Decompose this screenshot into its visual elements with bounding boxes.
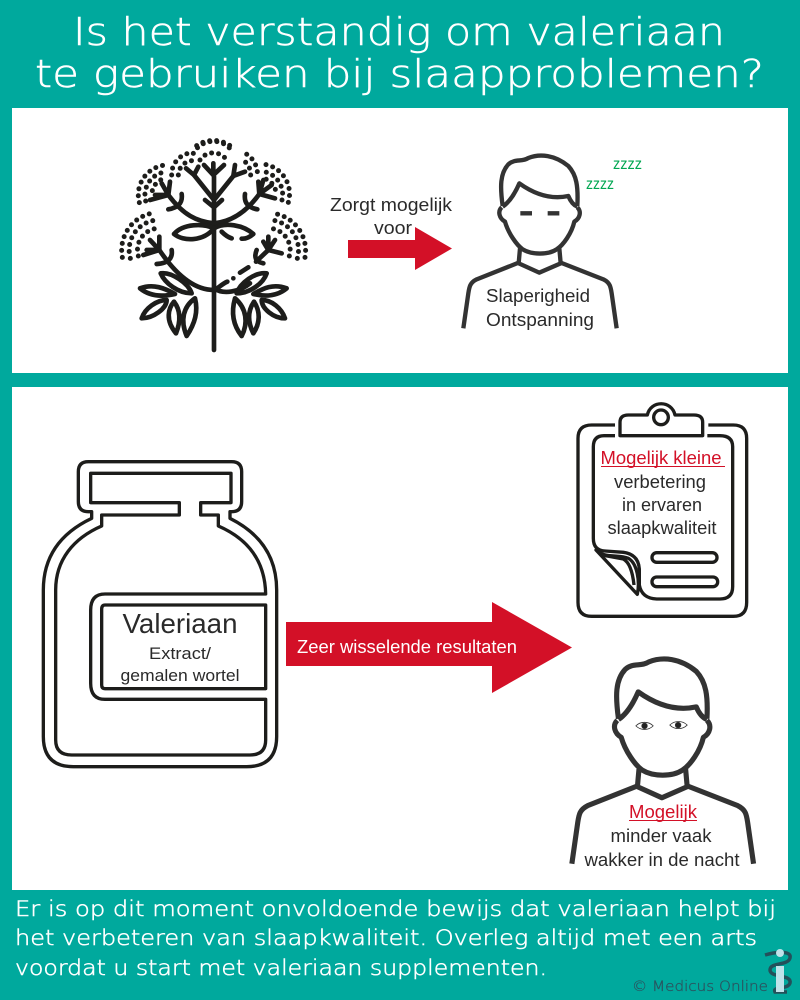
- jar label text: [120, 608, 240, 685]
- awake person text: [583, 802, 740, 870]
- clipboard text: slaapkwaliteit: [608, 518, 716, 538]
- text: zzzz: zzzz: [586, 176, 614, 193]
- eyes: [636, 722, 687, 729]
- icon: awake person: [572, 659, 754, 864]
- clipboard text: [600, 448, 725, 538]
- clipboard text: verbetering: [614, 472, 706, 492]
- awake person text: Mogelijk: [629, 802, 698, 822]
- clipboard text: Mogelijk kleine: [600, 448, 722, 468]
- awake person text: wakker in de nacht: [583, 850, 740, 870]
- icon: medicus logo: [765, 949, 790, 992]
- text: effects in person: [486, 286, 594, 330]
- text: zzzz: zzzz: [613, 156, 642, 173]
- arrow label: zorgt mogelijk voor: voor: [374, 218, 412, 238]
- title: Is het verstandig om valeriaan: [73, 10, 725, 54]
- icon: valerian plant: [122, 140, 306, 350]
- text: conclusion: voordat u start met valeriaan supplementen.: [15, 956, 547, 980]
- icon: clipboard: [578, 404, 747, 616]
- text: conclusion: het verbeteren van slaapkwaliteit. Overleg altijd met een arts: [15, 926, 757, 950]
- text: conclusion: Er is op dit moment onvoldoende bewijs dat valeriaan helpt bij: [15, 897, 776, 921]
- arrow label: zorgt mogelijk voor: Zorgt mogelijk: [330, 195, 453, 215]
- text: zzzz: [586, 156, 642, 193]
- icon: supplement jar: [43, 462, 277, 767]
- credit: medicus online: © Medicus Online: [632, 979, 768, 995]
- panel: bottom results panel: [12, 387, 788, 890]
- plant blossom dots: [122, 140, 306, 258]
- arrow: large red with text: Zeer wisselende resultaten: [297, 637, 517, 657]
- text: effects in person: Slaperigheid: [486, 286, 590, 306]
- text: effects in person: Ontspanning: [486, 310, 594, 330]
- arrow: small red: [348, 227, 452, 270]
- clipboard text: in ervaren: [622, 495, 702, 515]
- arrow: large red with text: [286, 602, 572, 693]
- panel: top effect panel: [12, 108, 788, 373]
- text: conclusion: [15, 897, 776, 980]
- jar label text: Extract/: [149, 644, 211, 663]
- jar label text: gemalen wortel: [120, 666, 240, 685]
- title: te gebruiken bij slaapproblemen?: [35, 52, 764, 96]
- title: [35, 10, 764, 96]
- awake person text: minder vaak: [610, 826, 713, 846]
- jar label text: Valeriaan: [122, 608, 238, 639]
- arrow label: zorgt mogelijk voor: [330, 195, 453, 238]
- icon: sleeping person: [463, 156, 617, 328]
